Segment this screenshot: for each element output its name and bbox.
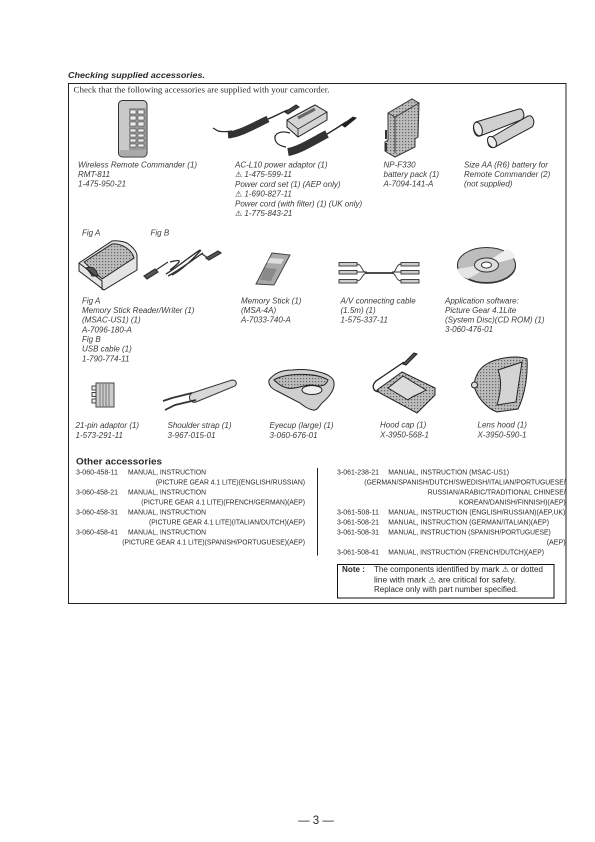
parts list: left column: (PICTURE GEAR 4.1 LITE)(FRENCH/GERMAN)(AEP) [141, 498, 305, 506]
parts list: right column: MANUAL, INSTRUCTION (ENGLISH/RUSSIAN)(AEP,UK) [388, 508, 566, 516]
page number: — 3 — [298, 815, 334, 827]
caption: application software: 3-060-476-01 [445, 325, 493, 334]
parts list: right column: 3-061-508-41 [337, 548, 379, 556]
caption: battery pack: A-7094-141-A [382, 180, 433, 189]
caption: AA batteries: Remote Commander (2) [464, 170, 551, 179]
note box: Note : [342, 565, 365, 574]
label: Fig A: Fig A [82, 228, 100, 238]
label: Fig B: Fig B [150, 228, 170, 238]
caption: eyecup: Eyecup (large) (1) [270, 421, 334, 430]
heading: other accessories: Other accessories [76, 456, 162, 468]
caption: memory stick: (MSA-4A) [241, 306, 276, 315]
parts list: right column: MANUAL, INSTRUCTION (MSAC-US1) [388, 468, 509, 476]
parts list: right column: 3-061-508-21 [337, 518, 379, 526]
caption: AV cable: A/V connecting cable [340, 296, 416, 306]
note box: line with mark ⚠ are critical for safety. [374, 576, 516, 584]
icon: memory stick reader [79, 241, 137, 290]
caption: memory stick: A-7033-740-A [240, 316, 291, 325]
caption: AC adaptor: ⚠ 1-690-827-11 [235, 190, 292, 199]
parts list: left column [76, 468, 305, 546]
note box: The components identified by mark ⚠ or dotted [374, 565, 543, 574]
parts list: right column: MANUAL, INSTRUCTION (FRENCH/DUTCH)(AEP) [388, 548, 544, 556]
caption: reader and USB: Memory Stick Reader/Writer (1) [82, 306, 195, 315]
caption: AC adaptor: AC-L10 power adaptor (1) [235, 160, 328, 170]
caption: hood cap: X-3950-568-1 [379, 430, 429, 440]
caption: AA batteries: (not supplied) [464, 180, 513, 189]
caption: application software: (System Disc)(CD ROM) (1) [445, 316, 545, 324]
caption: AC adaptor: ⚠ 1-775-843-21 [235, 209, 292, 218]
caption: lens hood: X-3950-590-1 [476, 430, 526, 440]
icon: AC power adaptor [213, 105, 356, 152]
caption: reader and USB: (MSAC-US1) (1) [82, 316, 141, 325]
caption: application software: Application software: [445, 296, 519, 306]
caption: battery pack: NP-F330 [384, 160, 416, 170]
parts list: left column: 3-060-458-31 [76, 508, 118, 516]
parts list: right column: 3-061-508-11 [337, 508, 379, 516]
caption: application software: Picture Gear 4.1Lite [445, 306, 517, 315]
icon: eyecup [269, 370, 334, 410]
icon: remote commander [118, 100, 147, 157]
icon: lens hood [472, 357, 527, 412]
parts list: left column: (PICTURE GEAR 4.1 LITE)(SPANISH/PORTUGUESE)(AEP) [122, 538, 305, 546]
icon: 21-pin adaptor [92, 383, 114, 407]
caption: AA batteries: Size AA (R6) battery for [464, 160, 548, 170]
caption: AC adaptor: ⚠ 1-475-599-11 [235, 170, 292, 179]
caption: reader and USB: 1-790-774-11 [82, 354, 129, 363]
caption: eyecup: 3-060-676-01 [270, 431, 318, 440]
parts list: right column: 3-061-508-31 [337, 528, 379, 536]
icon: shoulder strap [163, 380, 236, 410]
parts list: left column: MANUAL, INSTRUCTION [128, 488, 206, 496]
intro text: Check that the following accessories are supplied with your camcorder. [74, 84, 330, 94]
parts list: left column: MANUAL, INSTRUCTION [128, 468, 206, 476]
parts list: right column: 3-061-238-21 [337, 468, 379, 476]
parts list: left column: 3-060-458-11 [76, 468, 118, 476]
caption: shoulder strap: 3-967-015-01 [168, 431, 216, 440]
parts list: left column: (PICTURE GEAR 4.1 LITE)(ITALIAN/DUTCH)(AEP) [149, 518, 305, 526]
caption: memory stick: Memory Stick (1) [241, 296, 301, 306]
caption: 21-pin adaptor: 1-573-291-11 [76, 431, 123, 440]
parts list: right column [337, 468, 566, 556]
caption: AV cable: (1.5m) (1) [340, 306, 376, 315]
caption: remote commander: Wireless Remote Commander (1) [78, 160, 197, 170]
parts list: left column: MANUAL, INSTRUCTION [128, 528, 206, 536]
caption: reader and USB: Fig B [82, 335, 101, 344]
caption: reader and USB: Fig A [82, 296, 100, 306]
caption: reader and USB: A-7096-180-A [81, 325, 132, 334]
panel: accessories frame [68, 84, 566, 604]
caption: AC adaptor: Power cord (with filter) (1) (UK only) [235, 199, 362, 208]
icon: USB cable [144, 250, 221, 279]
parts list: right column: (AEP) [547, 538, 566, 546]
caption: remote commander: 1-475-950-21 [78, 180, 126, 189]
caption: reader and USB: USB cable (1) [82, 345, 132, 354]
icon: AV cable [339, 262, 419, 283]
caption: lens hood: Lens hood (1) [478, 420, 527, 430]
parts list: right column: KOREAN/DANISH/FINNISH)(AEP) [459, 498, 566, 506]
note box [338, 564, 554, 598]
caption: shoulder strap: Shoulder strap (1) [168, 421, 232, 430]
parts list: left column: 3-060-458-41 [76, 528, 118, 536]
caption: AC adaptor: Power cord set (1) (AEP only) [235, 180, 341, 189]
caption: remote commander: RMT-811 [78, 170, 110, 179]
caption: 21-pin adaptor: 21-pin adaptor (1) [76, 421, 139, 430]
parts list: right column: (GERMAN/SPANISH/DUTCH/SWEDISH/ITALIAN/PORTUGUESE/ [364, 478, 566, 486]
parts list: right column: MANUAL, INSTRUCTION (SPANISH/PORTUGUESE) [388, 528, 551, 536]
caption: battery pack: battery pack (1) [384, 170, 439, 179]
caption: hood cap: Hood cap (1) [380, 420, 426, 430]
icon: hood cap [373, 353, 435, 413]
icon: memory stick [256, 253, 290, 285]
icon: AA batteries [472, 109, 534, 149]
icon: battery pack [385, 99, 419, 157]
parts list: left column: 3-060-458-21 [76, 488, 118, 496]
caption: AC adaptor [234, 160, 362, 218]
parts list: left column: MANUAL, INSTRUCTION [128, 508, 206, 516]
parts list: left column: (PICTURE GEAR 4.1 LITE)(ENGLISH/RUSSIAN) [156, 478, 305, 486]
note box: Replace only with part number specified. [374, 585, 518, 594]
parts list: right column: MANUAL, INSTRUCTION (GERMAN/ITALIAN)(AEP) [388, 518, 549, 526]
icon: CD-ROM [457, 248, 516, 283]
caption: AV cable: 1-575-337-11 [340, 316, 388, 325]
parts list: right column: RUSSIAN/ARABIC/TRADITIONAL CHINESE/ [428, 488, 566, 496]
title: Checking supplied accessories. [68, 70, 205, 80]
